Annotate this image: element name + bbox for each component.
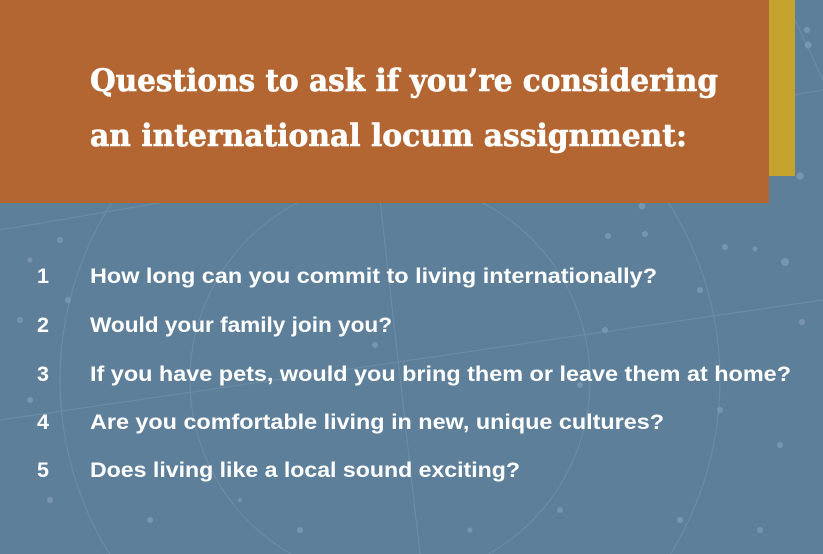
question list: If you have pets, would you bring them or leave them at home?	[90, 362, 791, 386]
question list: How long can you commit to living internationally?	[90, 264, 657, 288]
question list: 3	[37, 362, 49, 386]
question list: 1	[37, 264, 49, 288]
question list: Are you comfortable living in new, unique cultures?	[90, 410, 664, 434]
gold accent bar	[769, 0, 795, 176]
question list: 5	[37, 458, 49, 482]
question list: 2	[37, 313, 49, 337]
title: Questions to ask if you’re considering	[90, 63, 718, 99]
question list: Would your family join you?	[90, 313, 392, 337]
title panel	[0, 0, 769, 203]
question list: 4	[37, 410, 49, 434]
title: an international locum assignment:	[90, 118, 687, 154]
question list: Does living like a local sound exciting?	[90, 458, 520, 482]
title	[90, 63, 718, 154]
